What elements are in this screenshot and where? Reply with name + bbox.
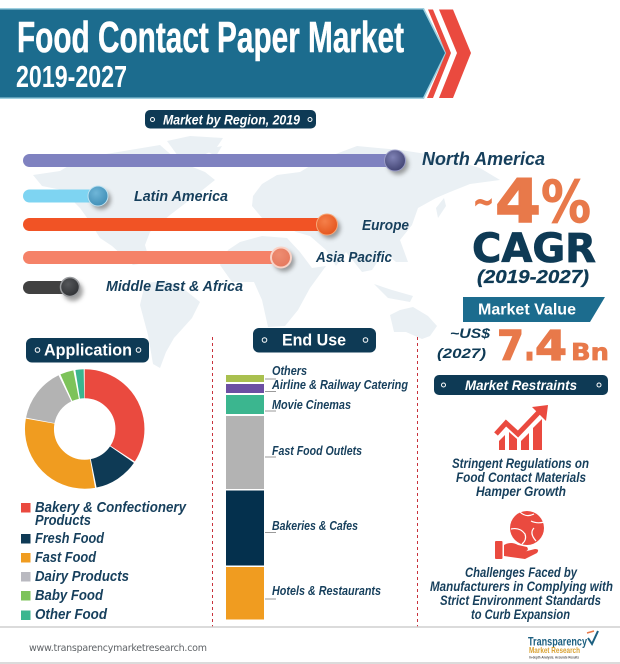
footer url: www.transparencymarketresearch.com (29, 643, 207, 654)
text: stringent regulations: Food Contact Materials (456, 470, 586, 485)
stacked bar chart: end use: Fast Food Outlets (272, 444, 362, 458)
text: stringent regulations (452, 456, 589, 499)
stacked bar chart: end use: Bakeries & Cafes (272, 519, 358, 533)
legend: application: Bakery & Confectionery (35, 499, 187, 516)
heading: end use (253, 328, 376, 352)
stat: market value: 4 (535, 322, 567, 370)
heading: market by region: Market by Region, 2019 (163, 112, 300, 128)
stat: CAGR: ~ (473, 185, 494, 220)
stat: CAGR: 4 (495, 167, 541, 237)
stat: CAGR (472, 167, 596, 287)
heading: application: Application (44, 340, 132, 360)
icon: globe in hand (495, 511, 544, 559)
heading: end use: End Use (282, 330, 346, 350)
footer rules (0, 627, 620, 663)
bar: Middle East and Africa (23, 278, 243, 301)
legend: application: Fast Food (35, 549, 97, 566)
icon: rising chart (496, 405, 548, 450)
legend: application: Other Food (35, 606, 108, 623)
title: Food Contact Paper Market (17, 13, 404, 62)
stat: CAGR: (2019-2027) (477, 267, 589, 287)
stat: market value: (2027) (437, 345, 486, 361)
stacked bar chart: end use (226, 364, 408, 620)
legend: application: Products (35, 512, 91, 529)
subtitle: 2019-2027 (16, 59, 127, 94)
legend: application: Dairy Products (35, 568, 129, 585)
legend: application: Fresh Food (35, 530, 105, 547)
heading: market value (463, 297, 605, 322)
bar: Europe: Europe (362, 217, 409, 234)
bar: Middle East and Africa: Middle East & Africa (106, 278, 243, 295)
heading: market value: Market Value (478, 302, 576, 318)
bar: Latin America: Latin America (134, 188, 228, 205)
title banner (0, 8, 471, 99)
world map background (33, 136, 500, 368)
icon: thin chevron (427, 10, 451, 98)
logo: transparency market research: In-depth Analysis. Accurate Results (529, 654, 580, 660)
text: stringent regulations: Hamper Growth (476, 484, 566, 499)
bar: Latin America (23, 186, 228, 210)
legend: application (21, 499, 187, 623)
bar: North America: North America (422, 149, 545, 169)
logo: transparency market research: Market Research (529, 645, 580, 655)
bar: Europe (23, 214, 409, 238)
stacked bar chart: end use: Airline & Railway Catering (271, 378, 408, 392)
stacked bar chart: end use: Others (272, 364, 307, 378)
heading: market restraints (434, 375, 608, 395)
bar: North America (23, 149, 545, 174)
stat: market value: . (524, 322, 535, 370)
text: challenges (430, 565, 613, 622)
logo: transparency market research: Transparency (528, 636, 587, 648)
heading: application (26, 338, 149, 362)
stat: CAGR: % (541, 168, 591, 236)
legend: application: Baby Food (35, 587, 104, 604)
stat: CAGR: CAGR (472, 226, 596, 272)
icon: thick chevron (439, 10, 471, 98)
stat: market value (437, 322, 609, 370)
stacked bar chart: end use: Hotels & Restaurants (272, 584, 381, 598)
stat: market value: Bn (571, 340, 609, 366)
dashed dividers (212, 337, 418, 627)
text: stringent regulations: Stringent Regulations on (452, 456, 589, 471)
heading: market restraints: Market Restraints (465, 377, 577, 393)
logo: transparency market research (528, 631, 598, 660)
stat: market value: 7 (497, 322, 524, 370)
text: challenges: to Curb Expansion (471, 607, 570, 622)
stat: market value: ~US$ (450, 325, 490, 341)
text: challenges: Challenges Faced by (465, 565, 578, 580)
bar: Asia Pacific: Asia Pacific (315, 249, 393, 266)
bar: Asia Pacific (23, 248, 393, 272)
stacked bar chart: end use: Movie Cinemas (272, 398, 351, 412)
donut chart: application (39, 384, 130, 474)
